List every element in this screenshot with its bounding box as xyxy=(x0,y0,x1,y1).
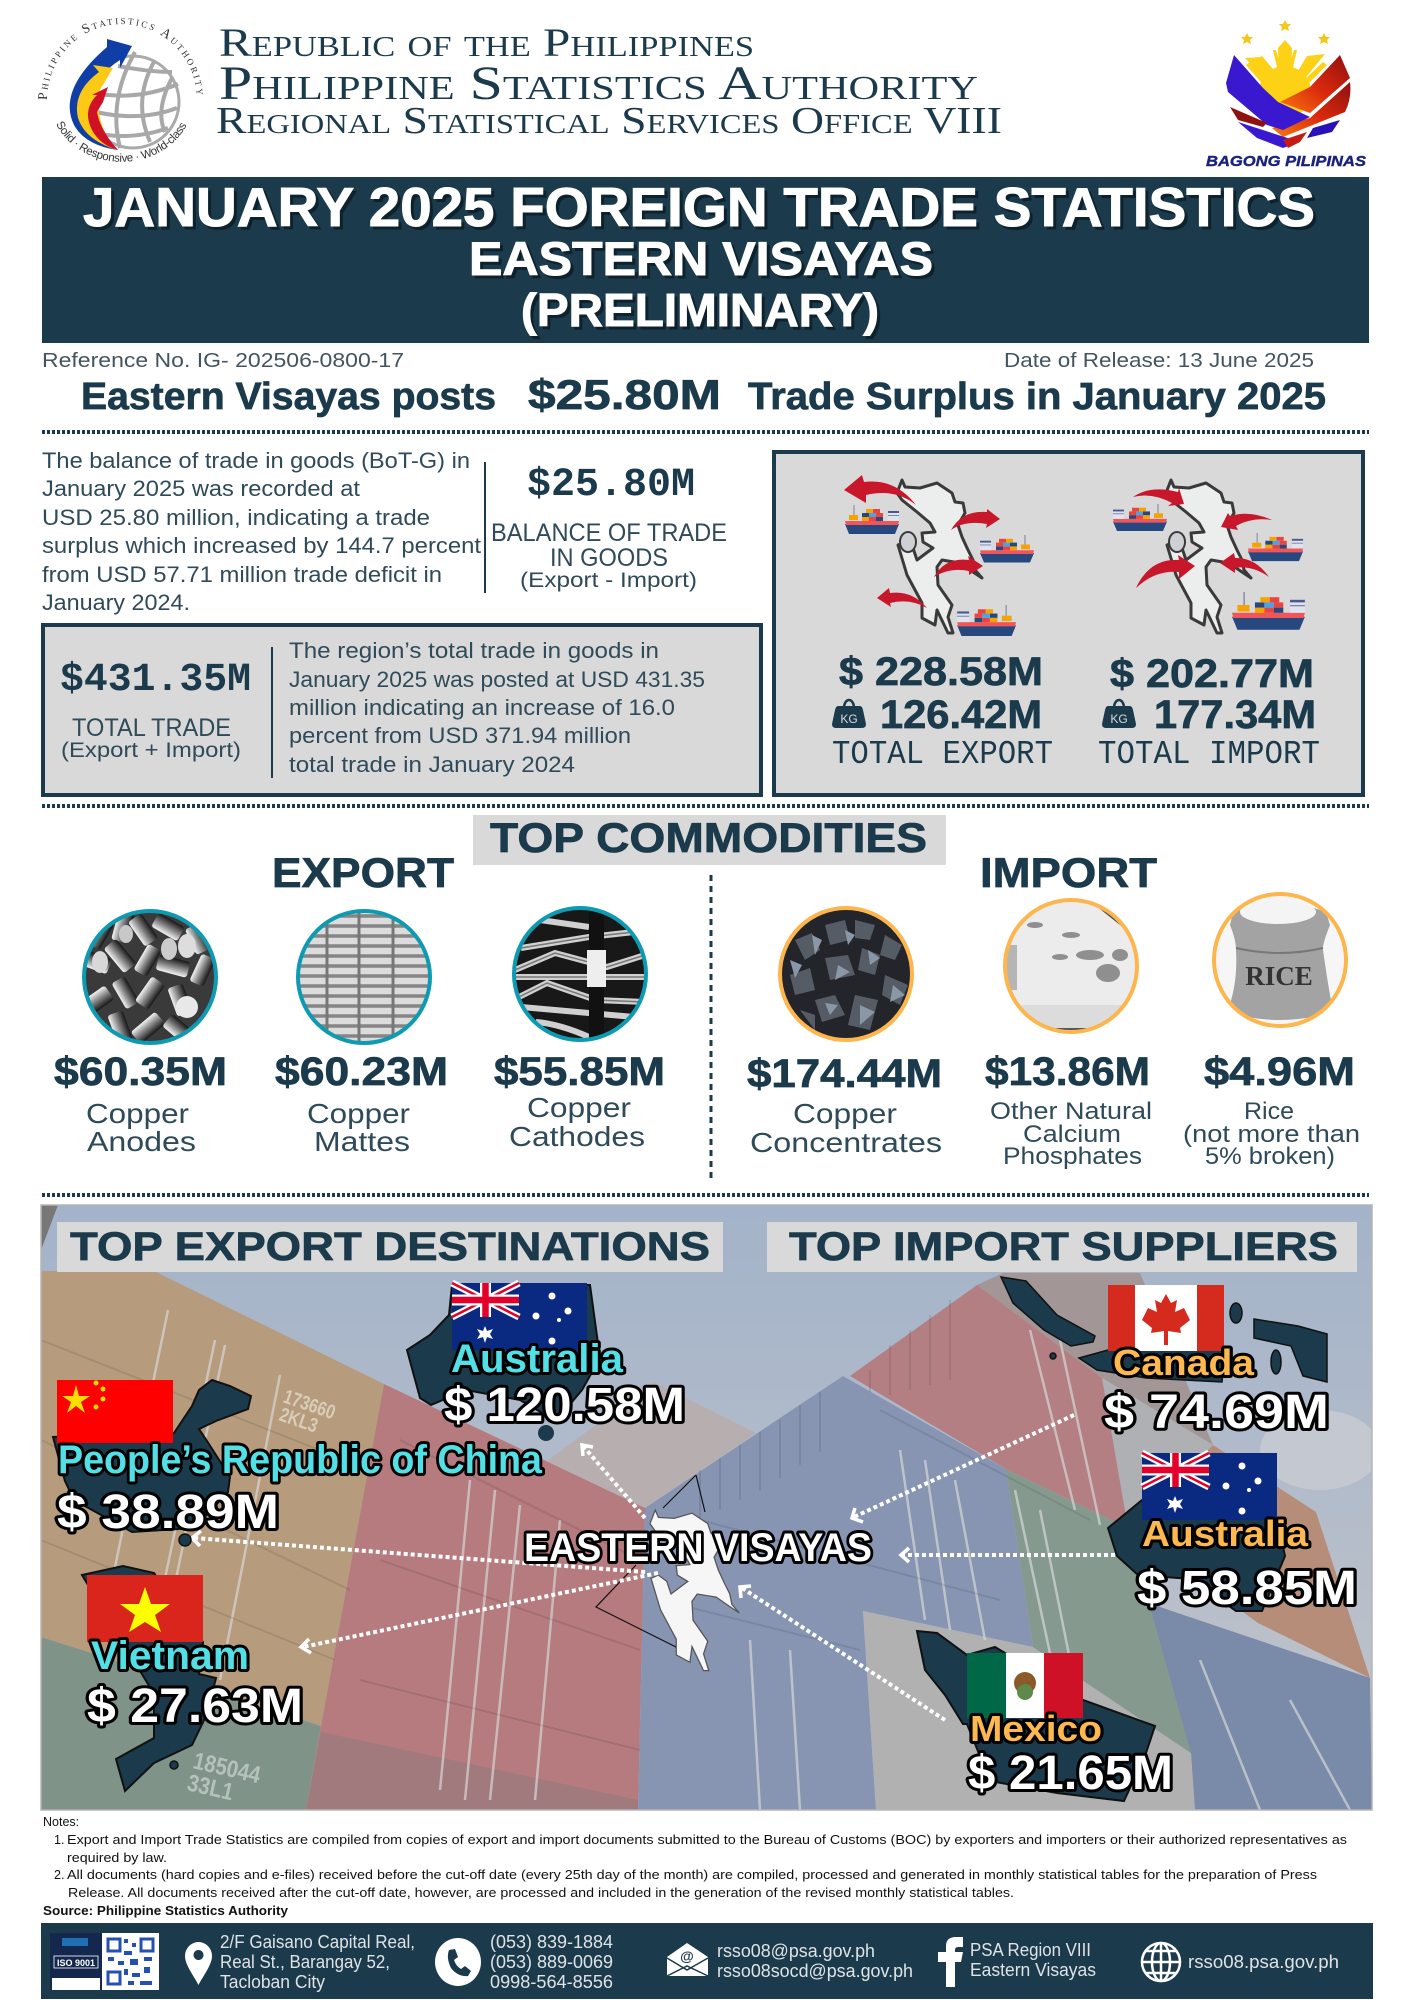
heading: top import suppliers: TOP IMPORT SUPPLIERS xyxy=(789,1225,1338,1269)
panel: total trade: (Export + Import) xyxy=(61,739,241,762)
total export figures: 126.42M xyxy=(880,693,1042,737)
destination: Vietnam: Vietnam xyxy=(91,1634,249,1678)
total import figures: $ 202.77M xyxy=(1110,652,1314,696)
address text xyxy=(220,1932,415,1992)
commodity: copper concentrates: Copper xyxy=(793,1098,897,1129)
commodity: rice: RICE xyxy=(1245,961,1313,991)
office header text: Regional Statistical Services Office VIII xyxy=(216,100,1002,142)
arrow: to China xyxy=(192,1531,645,1572)
balance of trade paragraph: January 2024. xyxy=(42,590,190,615)
commodity: copper cathodes xyxy=(494,908,665,1152)
headline: $25.80M xyxy=(528,371,721,418)
heading: import: IMPORT xyxy=(980,849,1157,896)
commodity: copper mattes: Mattes xyxy=(314,1126,410,1157)
notes: Notes: xyxy=(43,1815,79,1829)
website: rsso08.psa.gov.ph xyxy=(1188,1952,1339,1972)
email addresses: rsso08@psa.gov.ph xyxy=(717,1941,875,1961)
balance of trade paragraph: USD 25.80 million, indicating a trade xyxy=(42,505,430,530)
commodity: copper anodes: Anodes xyxy=(87,1126,196,1157)
balance of trade figure: IN GOODS xyxy=(550,544,668,572)
commodity: other natural calcium phosphates: $13.86M xyxy=(985,1050,1150,1094)
office header text: Republic of the Philippines xyxy=(219,20,754,65)
background: stacked shipping containers xyxy=(41,1205,1380,1810)
commodity: copper cathodes: Cathodes xyxy=(509,1121,645,1152)
balance of trade paragraph: January 2025 was recorded at xyxy=(42,476,360,501)
panel: total trade: TOTAL TRADE xyxy=(72,714,231,742)
office header text: Philippine Statistics Authority xyxy=(219,57,978,110)
balance of trade figure: BALANCE OF TRADE xyxy=(491,519,727,547)
release date: Date of Release: 13 June 2025 xyxy=(1004,350,1314,372)
balance of trade paragraph xyxy=(42,448,481,615)
headline xyxy=(81,371,1326,418)
icon: phone xyxy=(435,1938,481,1986)
commodity: rice: Rice xyxy=(1244,1098,1294,1125)
panel: total trade: percent from USD 371.94 million xyxy=(289,723,631,748)
import map with ships and arrows xyxy=(1113,480,1305,633)
address text: Real St., Barangay 52, xyxy=(220,1952,390,1972)
balance of trade paragraph: surplus which increased by 144.7 percent xyxy=(42,533,481,558)
commodity: rice: 5% broken) xyxy=(1205,1143,1335,1170)
phone numbers xyxy=(490,1932,613,1992)
commodity: copper cathodes: Copper xyxy=(527,1092,631,1123)
arrow: from Canada xyxy=(852,1415,1074,1522)
logo: Philippine Statistics Authority seal xyxy=(38,18,203,162)
panel: total trade: January 2025 was posted at USD 431.35 xyxy=(289,667,705,692)
footer bar xyxy=(41,1923,1373,1999)
email addresses: rsso08socd@psa.gov.ph xyxy=(717,1961,913,1981)
panel: total trade xyxy=(43,625,761,795)
icon: ISO certification and QR code: ISO 9001 xyxy=(57,1958,95,1968)
commodity: copper mattes xyxy=(275,911,448,1157)
destination: Vietnam xyxy=(82,1566,303,1791)
logo: Bagong Pilipinas xyxy=(1206,20,1366,170)
email addresses xyxy=(717,1941,913,1981)
reference number: Reference No. IG- 202506-0800-17 xyxy=(42,350,404,372)
total import figures: TOTAL IMPORT xyxy=(1098,736,1320,773)
balance of trade figure xyxy=(491,463,727,592)
commodity: copper anodes: $60.35M xyxy=(54,1050,227,1094)
balance of trade paragraph: from USD 57.71 million trade deficit in xyxy=(42,562,442,587)
commodity: copper anodes: Copper xyxy=(86,1098,189,1129)
label: Eastern Visayas: EASTERN VISAYAS xyxy=(524,1526,872,1570)
commodity: rice: (not more than xyxy=(1183,1121,1360,1148)
notes: Release. All documents received after the cut-off date, however, are processed and included in the generation of the revised monthly statistical tables. xyxy=(68,1886,1014,1900)
balance of trade figure: (Export - Import) xyxy=(520,569,697,592)
supplier: Australia xyxy=(1108,1453,1357,1615)
supplier: Canada xyxy=(1001,1277,1329,1439)
commodity: copper concentrates: $174.44M xyxy=(747,1052,942,1096)
background: stacked shipping containers: 2KL3 xyxy=(277,1403,321,1437)
total import figures: 177.34M xyxy=(1154,693,1316,737)
destination: Australia: Australia xyxy=(451,1337,624,1381)
address text: 2/F Gaisano Capital Real, xyxy=(220,1932,415,1952)
headline: Eastern Visayas posts xyxy=(81,376,496,418)
logo: Philippine Statistics Authority seal: Philippine Statistics Authority xyxy=(38,18,203,100)
notes xyxy=(43,1815,1347,1918)
panel: total trade: The region’s total trade in goods in xyxy=(289,638,659,663)
supplier: Canada: Canada xyxy=(1113,1342,1255,1383)
title banner: (PRELIMINARY) xyxy=(521,284,879,336)
balance of trade paragraph: The balance of trade in goods (BoT-G) in xyxy=(42,448,470,473)
commodity: other natural calcium phosphates: Other Natural xyxy=(990,1098,1152,1125)
destination: China xyxy=(53,1380,543,1546)
supplier: Mexico xyxy=(917,1631,1173,1801)
heading: top export destinations: TOP EXPORT DESTINATIONS xyxy=(70,1225,710,1269)
arrow: to Australia xyxy=(582,1445,645,1518)
phone numbers: 0998-564-8556 xyxy=(490,1972,613,1992)
commodity: other natural calcium phosphates xyxy=(985,898,1152,1170)
commodity: copper anodes xyxy=(54,908,227,1157)
icon: globe xyxy=(1142,1943,1180,1981)
total export figures: TOTAL EXPORT xyxy=(832,736,1053,773)
commodity: other natural calcium phosphates: Phosphates xyxy=(1003,1143,1142,1170)
address text: Tacloban City xyxy=(220,1972,325,1992)
background: stacked shipping containers: 33L1 xyxy=(185,1769,236,1806)
commodity: copper cathodes: $55.85M xyxy=(494,1050,665,1094)
panel: total trade: total trade in January 2024 xyxy=(289,752,575,777)
background: stacked shipping containers: 173660 xyxy=(281,1385,338,1424)
icon: facebook xyxy=(938,1937,963,1987)
office header text xyxy=(216,20,1002,142)
notes: All documents (hard copies and e-files) received before the cut-off date (every 25th day of the month) are compiled, processed and generated in monthly statistical tables for the preparation of Press xyxy=(67,1868,1317,1882)
total export figures xyxy=(832,650,1053,773)
icon: ISO certification and QR code xyxy=(50,1933,159,1990)
supplier: Australia: $ 58.85M xyxy=(1137,1562,1357,1615)
panel: total trade: million indicating an increase of 16.0 xyxy=(289,695,675,720)
notes: Export and Import Trade Statistics are compiled from copies of export and import documents submitted to the Bureau of Customs (BOC) by exporters and importers or their authorized representatives as xyxy=(67,1833,1347,1847)
notes: required by law. xyxy=(67,1851,167,1865)
commodity: copper concentrates: Concentrates xyxy=(750,1127,942,1158)
supplier: Mexico: Mexico xyxy=(970,1708,1102,1749)
commodity: copper mattes: $60.23M xyxy=(275,1050,448,1094)
commodity: rice: $4.96M xyxy=(1204,1050,1355,1094)
background: stacked shipping containers: 185044 xyxy=(191,1747,264,1789)
arrow: from Australia xyxy=(901,1548,1115,1562)
title banner: EASTERN VISAYAS xyxy=(469,232,933,285)
facebook page name: PSA Region VIII xyxy=(970,1940,1091,1960)
total import figures xyxy=(1098,652,1320,773)
total export figures: KG xyxy=(840,712,858,726)
supplier: Canada: $ 74.69M xyxy=(1104,1386,1329,1439)
panel: trade partners with container background xyxy=(41,1205,1380,1810)
icon: location pin xyxy=(185,1942,212,1985)
panel: total trade: $431.35M xyxy=(60,658,251,703)
commodity: rice xyxy=(1183,894,1360,1170)
title banner: JANUARY 2025 FOREIGN TRADE STATISTICS xyxy=(83,176,1315,238)
logo: Bagong Pilipinas: BAGONG PILIPINAS xyxy=(1206,153,1366,170)
destination: China: $ 38.89M xyxy=(57,1486,279,1539)
total import figures: KG xyxy=(1110,712,1128,726)
destination: China: People’s Republic of China xyxy=(58,1438,543,1482)
commodity: other natural calcium phosphates: Calcium xyxy=(1023,1121,1121,1148)
supplier: Mexico: $ 21.65M xyxy=(968,1747,1173,1800)
heading: export: EXPORT xyxy=(272,849,454,896)
phone numbers: (053) 839-1884 xyxy=(490,1932,613,1952)
supplier: Australia: Australia xyxy=(1142,1513,1309,1554)
icon: envelope xyxy=(667,1943,708,1976)
panel: total export and import xyxy=(774,452,1363,795)
arrow: from Mexico xyxy=(740,1586,945,1720)
total export figures: $ 228.58M xyxy=(839,650,1043,694)
commodity: copper mattes: Copper xyxy=(307,1098,410,1129)
headline: Trade Surplus in January 2025 xyxy=(748,376,1326,418)
logo: Philippine Statistics Authority seal: Solid · Responsive · World-class xyxy=(57,122,186,162)
arrow: to Vietnam xyxy=(301,1573,658,1653)
icon: envelope: @ xyxy=(680,1948,694,1964)
map: Eastern Visayas xyxy=(596,1475,739,1671)
notes: Source: Philippine Statistics Authority xyxy=(43,1904,288,1918)
commodity: copper concentrates xyxy=(747,908,942,1158)
export map with ships and arrows xyxy=(844,475,1034,636)
destination: Australia: $ 120.58M xyxy=(444,1379,685,1432)
balance of trade figure: $25.80M xyxy=(527,463,695,508)
phone numbers: (053) 889-0069 xyxy=(490,1952,613,1972)
facebook page name: Eastern Visayas xyxy=(970,1960,1096,1980)
notes: 1. xyxy=(54,1833,64,1847)
facebook page name xyxy=(970,1940,1096,1980)
heading: top commodities: TOP COMMODITIES xyxy=(490,814,927,861)
destination: Vietnam: $ 27.63M xyxy=(87,1680,303,1733)
title banner xyxy=(42,176,1369,343)
notes: 2. xyxy=(54,1868,64,1882)
destination: Australia xyxy=(407,1283,685,1441)
